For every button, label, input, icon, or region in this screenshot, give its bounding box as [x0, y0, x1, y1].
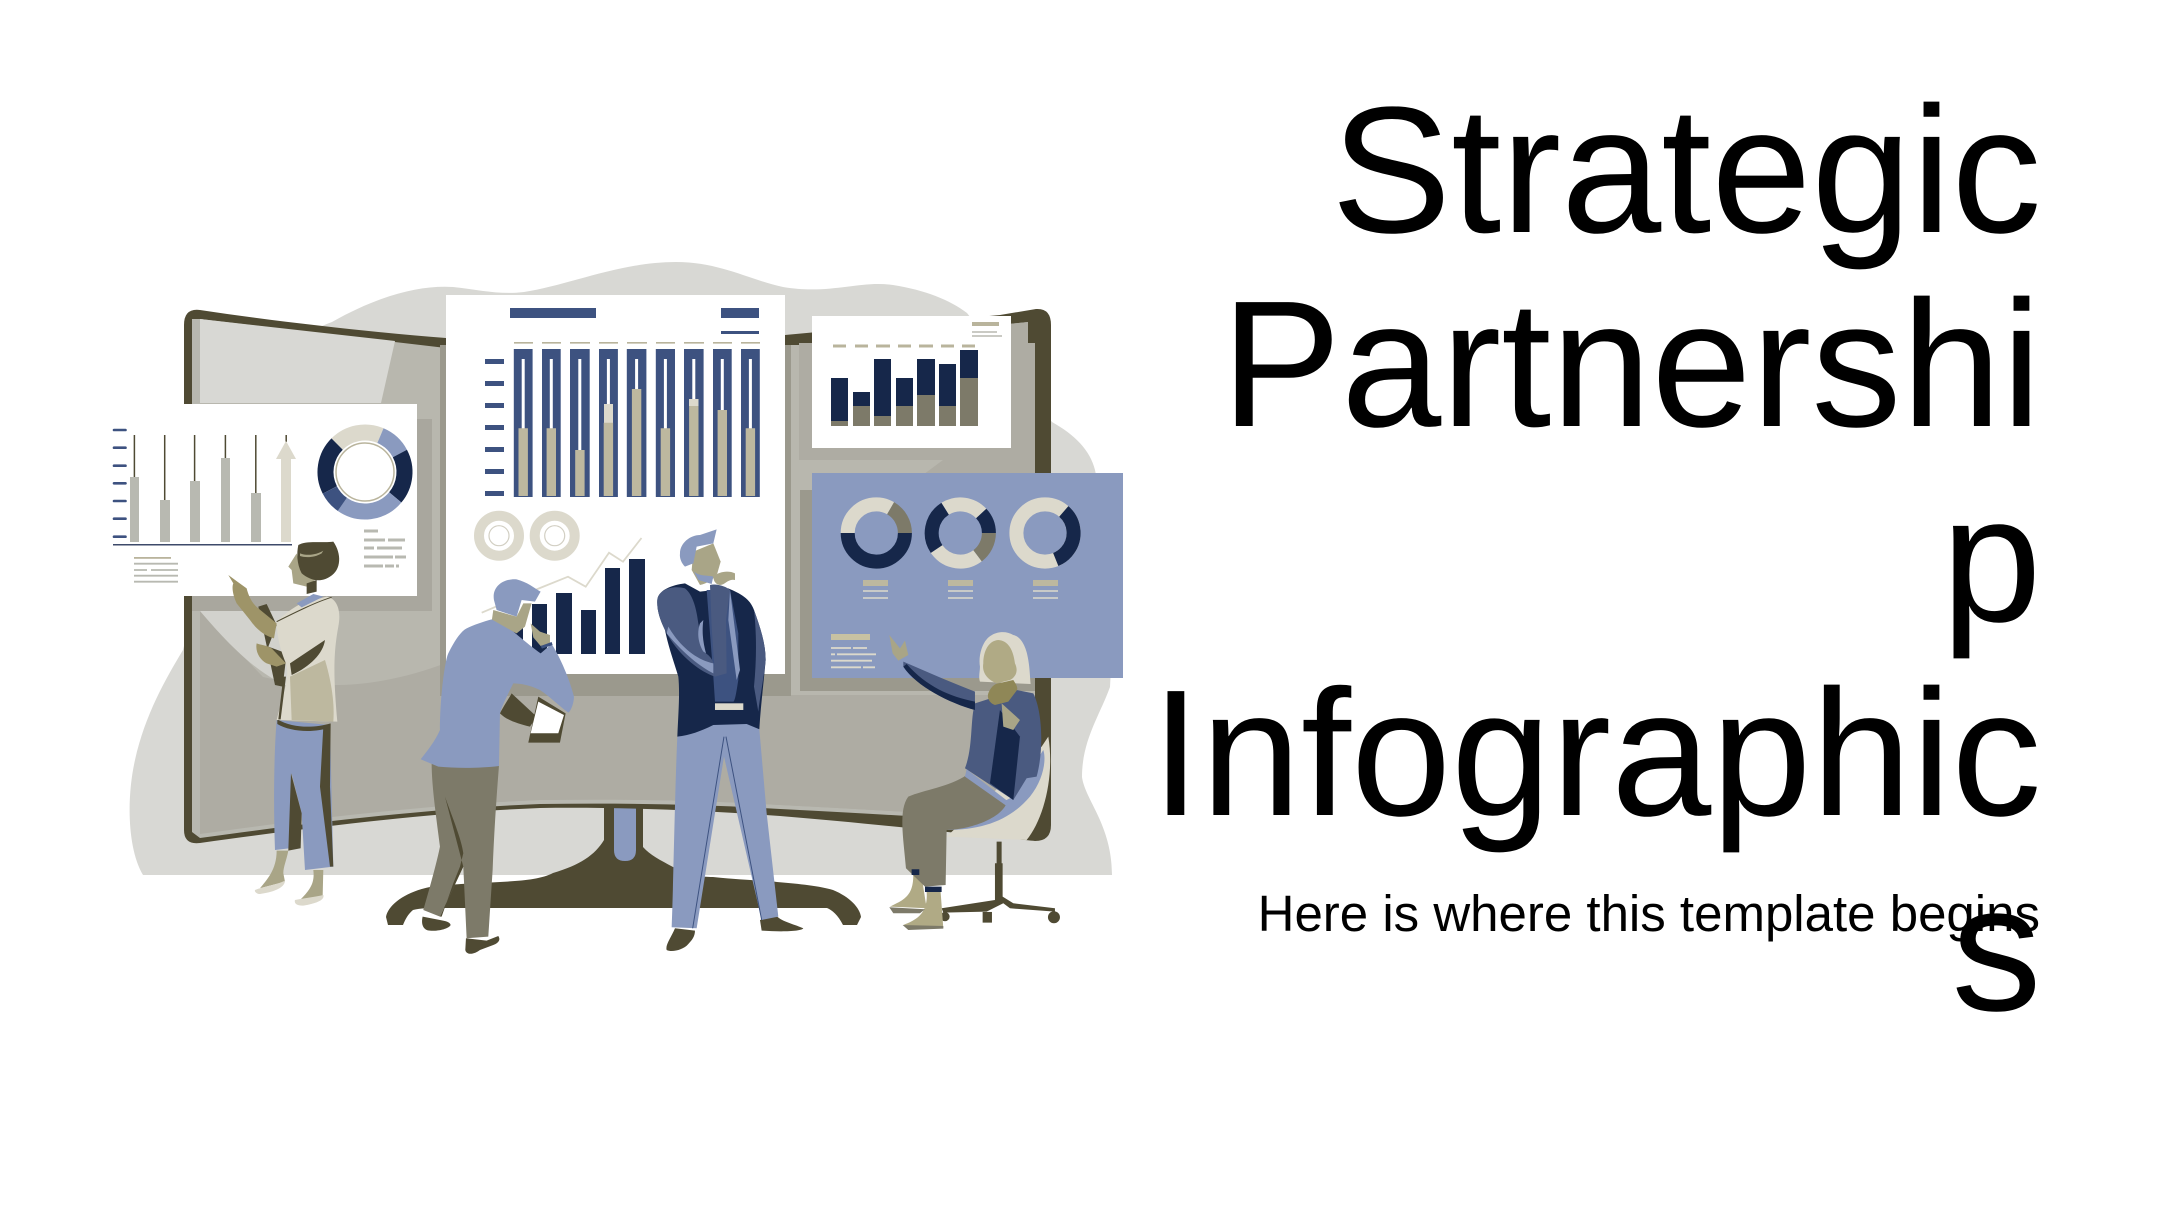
panel: top right stacked bars [812, 316, 1011, 448]
monitor frame [184, 309, 1051, 843]
office chair [940, 737, 1060, 923]
legend text lines left [134, 564, 178, 582]
person: bearded man standing [657, 529, 803, 951]
line chart [482, 538, 642, 613]
bar chart with arrow [113, 435, 296, 546]
person: woman standing pointing [228, 542, 339, 906]
panel: blue ring charts [812, 473, 1123, 678]
column chart with slots [514, 342, 760, 497]
axis ticks [485, 359, 504, 496]
monitor stand and base [386, 805, 861, 925]
header bars [510, 308, 759, 334]
dashed line [833, 344, 975, 348]
legend [972, 322, 999, 326]
navy segments [831, 350, 978, 421]
legend text lines right [364, 531, 406, 566]
background blob [130, 262, 1112, 875]
subtitle: Here is where this template begins [1258, 885, 2040, 942]
panel: left dashboard [113, 404, 421, 596]
panel: centre dashboard [446, 295, 785, 674]
ring chart 1 [837, 494, 915, 572]
ring chart [309, 416, 421, 528]
left axis ticks [114, 430, 126, 537]
ring captions [863, 580, 1058, 586]
person: seated woman on chair [889, 632, 1060, 930]
note lines [831, 634, 870, 640]
ring chart 2 [920, 493, 1001, 573]
person: man with clipboard from behind [421, 579, 574, 954]
ring chart 3 [1005, 493, 1085, 573]
olive segments [831, 378, 978, 426]
navy bar chart [510, 559, 645, 654]
monitor screen [192, 319, 1035, 838]
title: Strategic Partnership Infographics [1151, 70, 2042, 1048]
small ring gauges [479, 516, 575, 556]
